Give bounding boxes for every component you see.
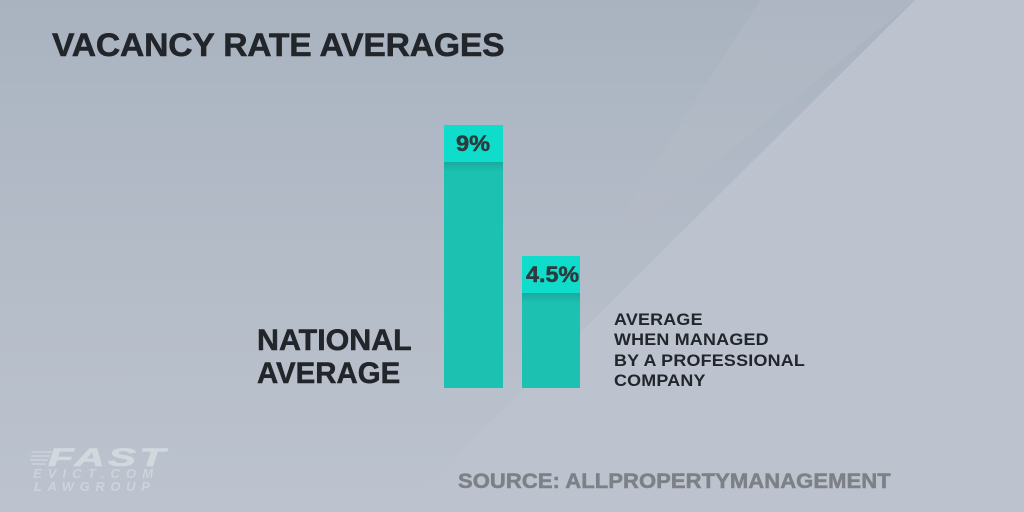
bar: professional company 4.5% — [522, 256, 580, 388]
value cap: 9% — [444, 125, 503, 162]
title: VACANCY RATE AVERAGES — [52, 27, 504, 63]
bar: national average 9% — [444, 125, 503, 388]
label line: national: NATIONAL — [257, 324, 412, 357]
label: professional average: BY A PROFESSIONAL — [614, 352, 805, 370]
label line: average: AVERAGE — [257, 357, 400, 390]
bar shadow — [444, 162, 503, 172]
source: SOURCE: ALLPROPERTYMANAGEMENT — [458, 470, 891, 493]
label: national average — [257, 324, 412, 390]
bar shadow — [522, 293, 580, 303]
logo — [30, 444, 168, 494]
value cap: 4.5% — [522, 256, 580, 293]
logo word: fast: FAST — [48, 444, 168, 472]
logo speed lines — [30, 451, 52, 465]
label: professional average — [614, 311, 805, 390]
label: professional average: AVERAGE — [614, 311, 703, 329]
value cap: 9%: 9% — [456, 131, 490, 156]
label: professional average: COMPANY — [614, 372, 706, 390]
logo word: lawgroup: LAWGROUP — [34, 479, 155, 494]
logo word: evict.com: EVICT.COM — [33, 466, 159, 481]
label: professional average: WHEN MANAGED — [614, 331, 769, 349]
value cap: 4.5%: 4.5% — [526, 262, 579, 287]
